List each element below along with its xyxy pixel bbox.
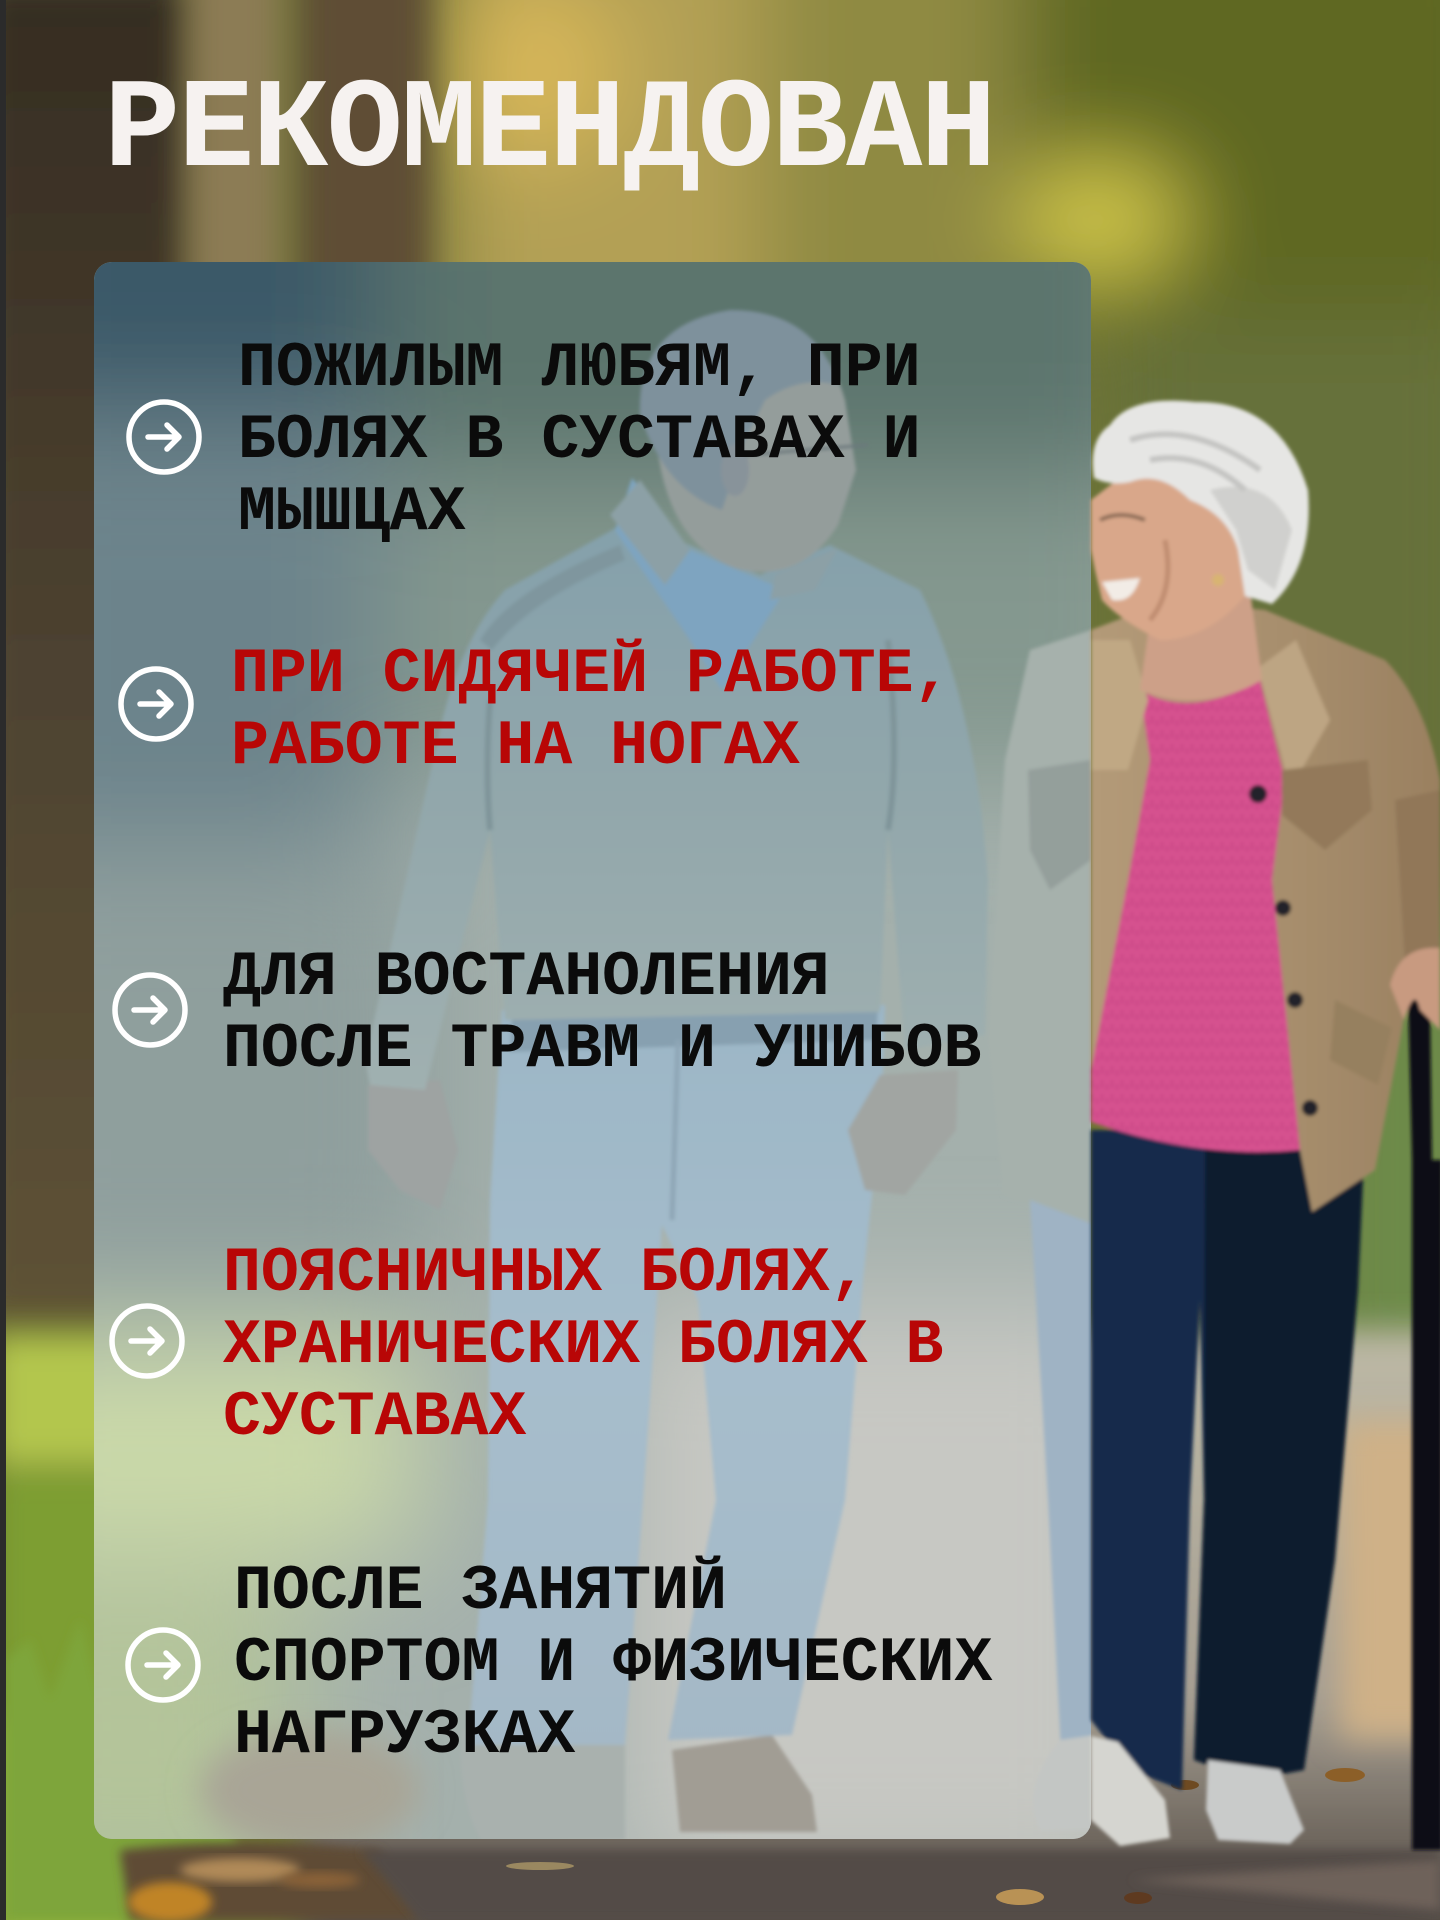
woman's leg seen through the panel [1030, 1200, 1091, 1741]
list item 1: icon and text [126, 332, 921, 548]
woman: collar and pockets [1091, 640, 1148, 770]
woman: hand [1390, 948, 1440, 1030]
man: sweater [365, 520, 988, 1090]
icon: arrow in circle [118, 666, 194, 742]
text: item 3: ДЛЯ ВОСТАНОЛЕНИЯ ПОСЛЕ ТРАВМ И УШИБОВ [223, 941, 981, 1085]
woman: shoes [1091, 1736, 1170, 1846]
icon: arrow in circle [125, 1627, 201, 1703]
man: jeans [468, 1005, 885, 1745]
man: right shoe [672, 1735, 817, 1832]
woman: neck [1140, 590, 1262, 700]
man: left hand [368, 1080, 458, 1210]
text: item 5: ПОСЛЕ ЗАНЯТИЙ СПОРТОМ И ФИЗИЧЕСКИХ НАГРУЗКАХ [234, 1555, 992, 1771]
icon: arrow in circle [112, 972, 188, 1048]
icon: arrow in circle [126, 399, 202, 475]
text: item 1: ПОЖИЛЫМ ЛЮБЯМ, ПРИ БОЛЯХ В СУСТАВАХ И МЫШЦАХ [238, 332, 921, 548]
woman: hair [1093, 401, 1309, 604]
list item 2: icon and text [118, 638, 951, 782]
cane [1408, 986, 1440, 1850]
panel: translucent list card [94, 262, 1091, 1839]
title: РЕКОМЕНДОВАН [104, 60, 995, 204]
text: item 4: ПОЯСНИЧНЫХ БОЛЯХ, ХРАНИЧЕСКИХ БОЛЯХ В СУСТАВАХ [223, 1237, 943, 1453]
man: left foot [600, 1746, 624, 1838]
woman: sweater [1091, 680, 1300, 1152]
woman: jacket buttons [1249, 785, 1318, 1116]
man: head [653, 312, 856, 572]
text: item 2: ПРИ СИДЯЧЕЙ РАБОТЕ, РАБОТЕ НА НОГАХ [231, 638, 951, 782]
list item 5: icon and text [125, 1555, 992, 1771]
list item 3: icon and text [112, 941, 981, 1085]
woman: face [1091, 470, 1250, 640]
woman: smile [1102, 578, 1140, 601]
woman's jacket seen through the panel [1003, 630, 1091, 1830]
icon: arrow in circle [109, 1303, 185, 1379]
list item 4: icon and text [109, 1237, 943, 1453]
woman: trousers [1091, 1130, 1365, 1790]
man: right hand [848, 1070, 958, 1195]
woman outside the panel [1091, 401, 1440, 1850]
woman's shoe seen through the panel [1060, 1734, 1091, 1830]
man: collar and shirt [615, 478, 785, 690]
woman: jacket [1091, 600, 1440, 1212]
man seen through the panel [365, 310, 988, 1840]
